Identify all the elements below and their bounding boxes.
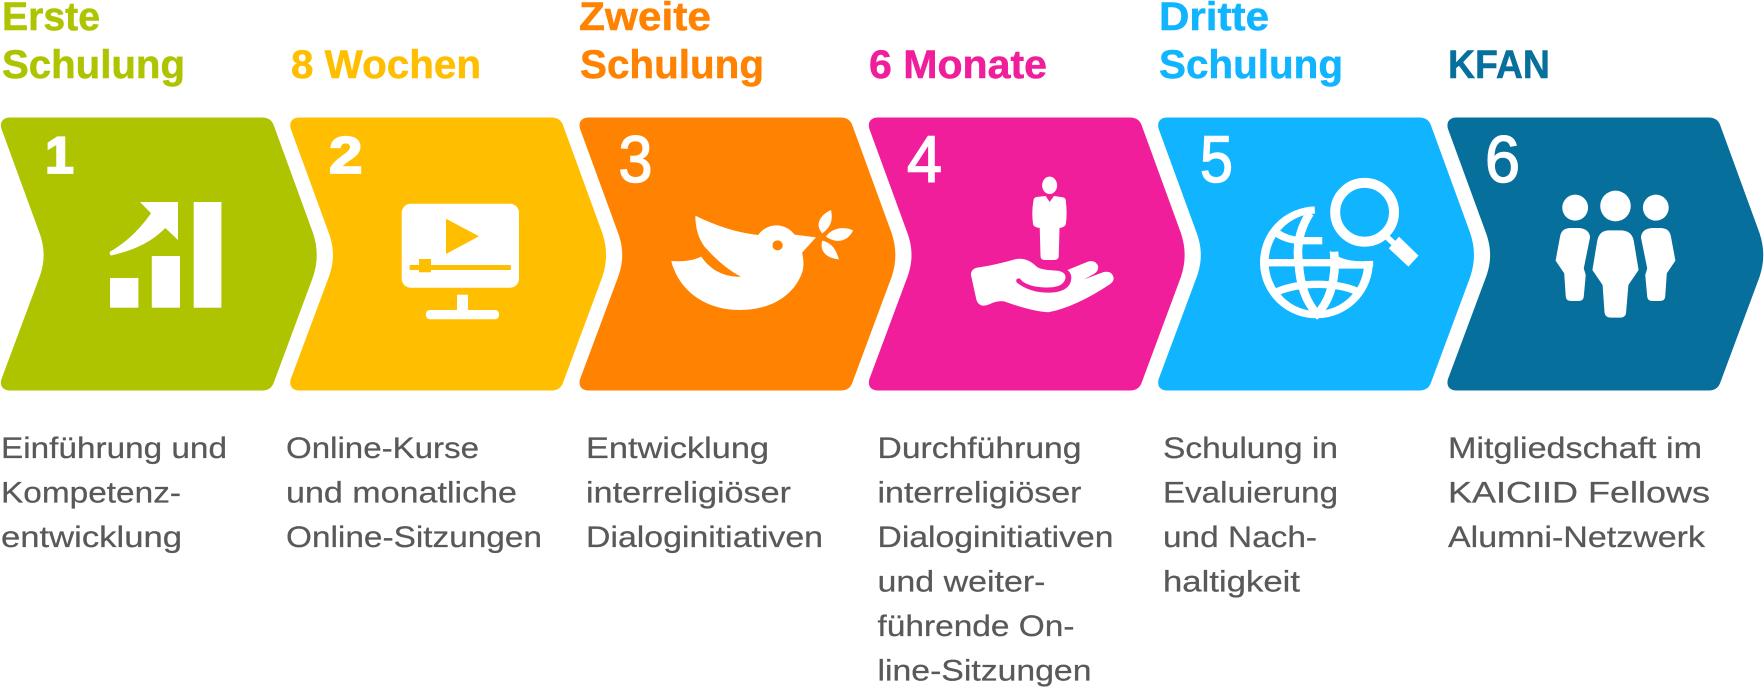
description 1: [1, 432, 227, 554]
description 2: und monatliche: [286, 476, 517, 510]
description 1: Einführung und: [1, 432, 227, 465]
chevron 4: [869, 118, 1185, 390]
description 5: Evaluierung: [1163, 476, 1338, 510]
description 3: Entwicklung: [586, 432, 769, 465]
description 3: interreligiöser: [586, 476, 791, 510]
panel: step 1: [1, 0, 317, 554]
description 4: und weiter-: [878, 566, 1046, 598]
description 3: Dialoginitiativen: [586, 521, 823, 554]
description 2: Online-Sitzungen: [286, 521, 542, 554]
number 2: 2: [329, 127, 362, 185]
number 6: 6: [1485, 122, 1520, 196]
icon: globe with magnifying glass: [1264, 183, 1419, 315]
icon: dove with olive branch: [671, 210, 853, 310]
description 5: haltigkeit: [1163, 566, 1301, 598]
number 1: 1: [45, 127, 74, 185]
description 2: [286, 432, 542, 554]
description 6: Mitgliedschaft im: [1448, 432, 1702, 465]
description 6: [1448, 432, 1710, 554]
number 5: 5: [1200, 122, 1233, 196]
description 5: [1163, 432, 1338, 598]
panel: step 4: [869, 43, 1185, 688]
chevron 3: [580, 118, 895, 390]
chevron 2: [290, 118, 606, 390]
description 4: line-Sitzungen: [878, 654, 1092, 688]
description 1: Kompetenz-: [1, 476, 181, 510]
heading: Zweite Schulung: [579, 0, 764, 87]
chevron 5: [1158, 118, 1474, 390]
icon: person above open hand: [971, 177, 1114, 312]
description 5: Schulung in: [1163, 432, 1338, 465]
panel: step 3: [579, 0, 895, 554]
icon: three people: [1556, 191, 1675, 318]
heading: Erste Schulung: Schulung: [2, 43, 185, 87]
panel: step 2: [286, 43, 606, 554]
heading: 8 Wochen: 8 Wochen: [291, 43, 481, 87]
description 6: KAICIID Fellows: [1448, 476, 1710, 510]
panel: step 6: [1447, 43, 1763, 554]
number 4: 4: [907, 122, 942, 196]
description 6: Alumni-Netzwerk: [1448, 521, 1706, 554]
heading: KFAN: KFAN: [1448, 43, 1550, 87]
description 4: führende On-: [878, 610, 1074, 643]
description 4: [878, 432, 1114, 688]
heading: Erste Schulung: [2, 0, 185, 87]
chevron 1: [1, 118, 317, 390]
heading: Dritte Schulung: Schulung: [1159, 43, 1343, 87]
panel: step 5: [1158, 0, 1474, 598]
icon: rising bar chart with arrow: [110, 202, 221, 308]
number 3: 3: [618, 122, 652, 196]
heading: Zweite Schulung: Schulung: [580, 43, 764, 87]
description 3: [586, 432, 823, 554]
heading: Dritte Schulung: [1159, 0, 1343, 87]
description 1: entwicklung: [1, 521, 182, 554]
chevron 6: [1447, 118, 1763, 390]
description 5: und Nach-: [1163, 521, 1317, 554]
heading: 6 Monate: 6 Monate: [869, 43, 1047, 87]
description 4: Durchführung: [878, 432, 1082, 465]
description 4: Dialoginitiativen: [878, 521, 1114, 554]
icon: video monitor: [402, 204, 519, 319]
description 4: interreligiöser: [878, 476, 1082, 510]
description 2: Online-Kurse: [286, 432, 479, 465]
